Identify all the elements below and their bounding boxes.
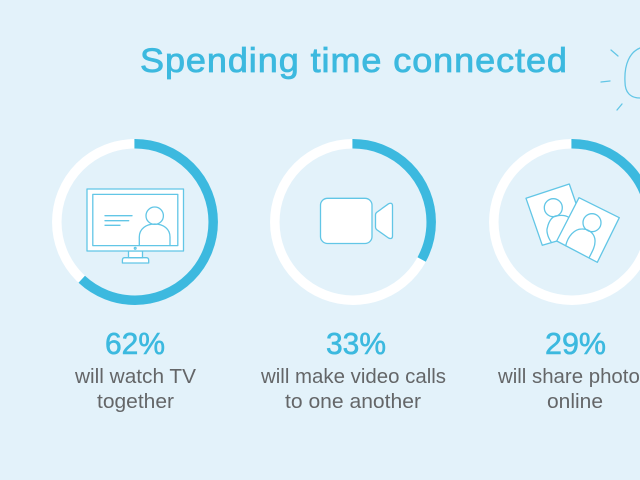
icon: TV with person on screen	[87, 189, 184, 263]
icon: partial lightbulb sketch	[601, 48, 640, 110]
description: watch TV	[74, 366, 197, 413]
icon: video camera	[320, 198, 392, 244]
description: watch TV: together	[97, 391, 174, 413]
description: share photos: online	[547, 391, 603, 413]
icon: two overlapping photos	[526, 184, 619, 262]
description: video calls: will make video calls	[260, 366, 446, 388]
panel: share photos	[494, 144, 640, 413]
ring chart: 33%	[275, 144, 431, 300]
ring chart: 29%	[494, 144, 640, 300]
panel: video calls	[260, 144, 446, 413]
ring chart: 62%	[57, 144, 213, 300]
stat: 62%: 62%	[105, 326, 165, 361]
description: watch TV: will watch TV	[74, 366, 197, 388]
description: share photos	[497, 366, 640, 413]
panel: watch TV	[57, 144, 213, 413]
title: Spending time connected	[140, 42, 567, 80]
description: video calls: to one another	[285, 391, 421, 413]
stat: 33%: 33%	[326, 326, 386, 361]
stat: 29%: 29%	[545, 326, 606, 361]
description: video calls	[260, 366, 446, 413]
